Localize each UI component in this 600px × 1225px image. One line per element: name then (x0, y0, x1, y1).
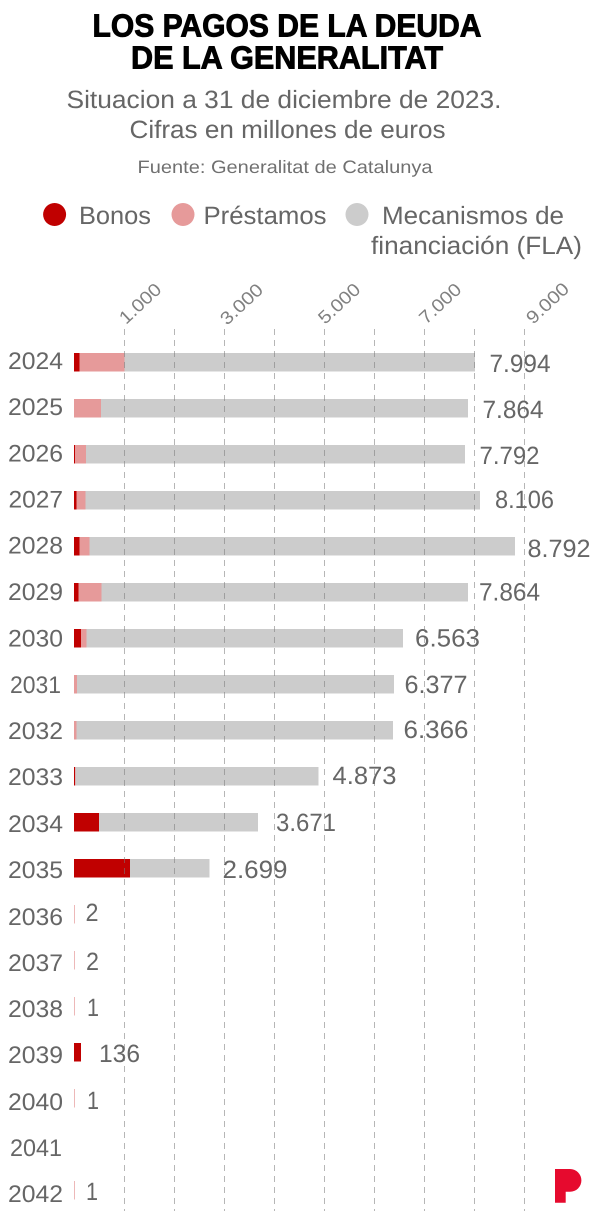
row 2035: 2035 (8, 857, 63, 884)
subtitle: Cifras en millones de euros (130, 116, 446, 144)
row 2024: 7.994 (490, 350, 551, 378)
row 2040 (8, 1087, 99, 1116)
row 2034: 3.671 (276, 809, 336, 837)
row 2032 (8, 716, 468, 745)
row 2038 (8, 994, 99, 1023)
bar chart (8, 348, 590, 1208)
row 2036 (8, 899, 98, 931)
row 2029 (8, 578, 540, 606)
row 2037: 2 (86, 948, 99, 976)
legend (43, 202, 582, 260)
legend item: Mecanismos de financiación: financiación (FLA) (371, 232, 582, 260)
axis labels: 9.000 (522, 279, 573, 328)
row 2041: 2041 (10, 1135, 62, 1162)
row 2028: 2028 (8, 532, 63, 560)
row 2024 (8, 348, 551, 378)
row 2026: 7.792 (480, 442, 540, 470)
row 2027 (8, 486, 554, 514)
row 2029: 2029 (8, 579, 63, 606)
row 2030 (8, 624, 480, 652)
row 2040: 1 (87, 1087, 99, 1115)
axis labels (115, 279, 573, 329)
subtitle: Situacion a 31 de diciembre de 2023. (66, 86, 502, 114)
axis labels: 3.000 (216, 280, 267, 329)
row 2042: 1 (86, 1178, 98, 1206)
row 2032: 6.366 (404, 716, 468, 744)
title (92, 8, 482, 76)
row 2038: 2038 (8, 996, 63, 1023)
row 2037 (8, 948, 99, 977)
row 2037: 2037 (8, 950, 63, 977)
row 2042: 2042 (8, 1181, 63, 1208)
row 2034: 2034 (8, 811, 63, 838)
row 2039: 136 (99, 1040, 140, 1068)
row 2026: 2026 (8, 440, 63, 468)
axis labels: 7.000 (415, 279, 465, 328)
row 2039: 2039 (8, 1042, 63, 1069)
legend item: Mecanismos de financiación (346, 202, 582, 260)
row 2031: 2031 (10, 672, 61, 699)
row 2031 (10, 671, 468, 699)
source: Fuente: Generalitat de Catalunya (138, 157, 434, 177)
legend item: Mecanismos de financiación: Mecanismos de (382, 202, 564, 230)
axis labels: 5.000 (314, 279, 364, 328)
title: DE LA GENERALITAT (131, 40, 443, 76)
row 2027: 2027 (8, 486, 63, 514)
row 2030: 2030 (8, 626, 63, 652)
row 2033: 2033 (8, 764, 63, 791)
legend item: Bonos (43, 202, 151, 230)
row 2038: 1 (87, 994, 99, 1022)
row 2025: 7.864 (482, 396, 544, 424)
row 2030: 6.563 (415, 624, 480, 652)
row 2025: 2025 (8, 394, 63, 421)
row 2039 (8, 1040, 140, 1069)
icon: publisher logo (555, 1169, 581, 1203)
row 2028 (8, 532, 590, 563)
row 2028: 8.792 (528, 535, 590, 563)
row 2025 (8, 394, 544, 424)
row 2036: 2036 (8, 904, 63, 931)
row 2034 (8, 809, 336, 838)
row 2031: 6.377 (404, 671, 468, 699)
row 2035 (8, 856, 288, 884)
subtitle (66, 86, 502, 144)
row 2029: 7.864 (479, 578, 540, 606)
row 2033 (8, 762, 396, 791)
row 2033: 4.873 (332, 762, 396, 790)
title: LOS PAGOS DE LA DEUDA (92, 8, 482, 44)
legend item: Bonos: Bonos (79, 202, 151, 230)
row 2036: 2 (86, 899, 98, 927)
row 2024: 2024 (8, 348, 63, 375)
row 2035: 2.699 (222, 856, 288, 884)
legend item: Préstamos: Préstamos (204, 202, 326, 230)
row 2042 (8, 1178, 98, 1208)
row 2026 (8, 440, 540, 470)
row 2040: 2040 (8, 1089, 63, 1116)
row 2032: 2032 (8, 718, 63, 745)
axis labels: 1.000 (115, 279, 165, 328)
row 2027: 8.106 (495, 486, 554, 514)
